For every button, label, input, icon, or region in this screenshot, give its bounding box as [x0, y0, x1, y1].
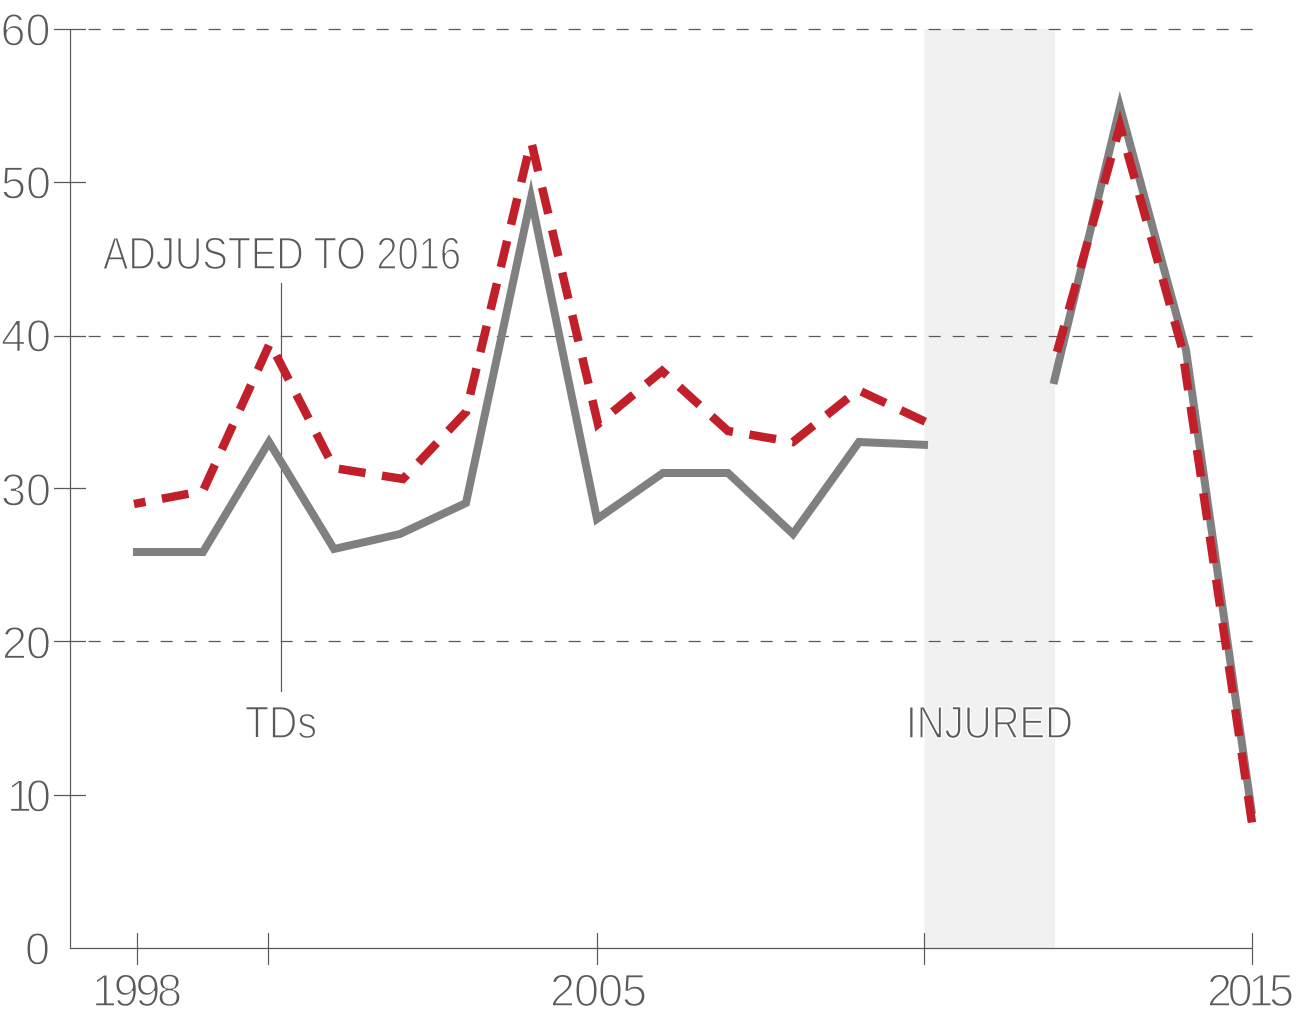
line: TDs — [133, 107, 1252, 814]
label: adjusted to 2016: ADJUSTED TO 2016 — [103, 228, 461, 279]
y-axis labels: 50 — [1, 158, 51, 208]
y-axis labels: 30 — [1, 464, 51, 516]
x-axis labels: 2005 — [550, 965, 647, 1016]
x-axis labels: 2015 — [1207, 965, 1294, 1016]
shaded band: injured season — [924, 29, 1055, 948]
y-axis labels: 0 — [25, 924, 50, 974]
label: injured: INJURED — [906, 697, 1073, 748]
x-axis labels: 1998 — [92, 965, 182, 1016]
y-axis labels: 10 — [7, 770, 51, 822]
line: adjusted to 2016 — [134, 126, 1252, 823]
leader line — [280, 283, 282, 692]
y-axis labels — [0, 4, 51, 974]
y-axis labels: 40 — [1, 310, 51, 362]
label: TDs: TDs — [245, 697, 317, 748]
y-axis labels: 60 — [0, 4, 50, 56]
y-axis labels: 20 — [2, 618, 51, 668]
x-axis labels — [92, 965, 1294, 1016]
